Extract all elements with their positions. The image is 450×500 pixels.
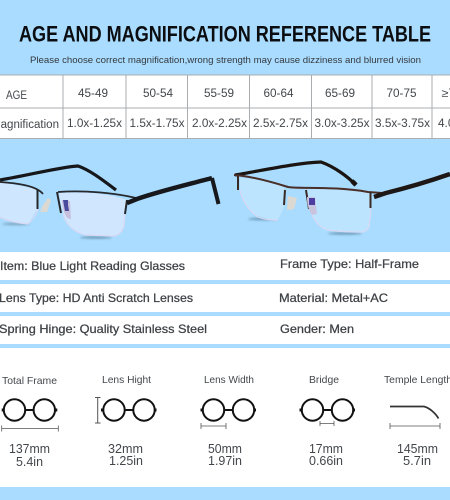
measurement: bridge [300, 374, 355, 468]
reference table: 60-64 [264, 88, 294, 100]
photo: glasses left [0, 166, 218, 239]
measurement: total frame: 5.4in [16, 455, 43, 469]
measurement: lens width: 1.97in [208, 454, 242, 468]
photo: glasses right [234, 162, 450, 235]
measurement: temple length: 145mm [397, 442, 438, 456]
reference table: 2.0x-2.25x [192, 118, 247, 130]
measurement: lens width [200, 374, 256, 468]
measurement: bridge: 0.66in [309, 454, 343, 468]
reference table: 1.0x-1.25x [67, 118, 122, 130]
reference table: 55-59 [204, 88, 234, 100]
reference table: 2.5x-2.75x [253, 118, 308, 130]
reference table: 50-54 [143, 88, 174, 100]
spec rows [0, 252, 450, 487]
spec rows: Gender: Men [280, 322, 354, 336]
measurement: lens height: 1.25in [109, 454, 143, 468]
measurement: lens height: Lens Hight [102, 374, 151, 386]
measurement: temple length: 5.7in [403, 454, 431, 468]
reference table: 70-75 [386, 88, 416, 100]
reference table: 65-69 [325, 88, 355, 100]
measurement: total frame: 137mm [9, 442, 50, 456]
reference table: 3.0x-3.25x [314, 118, 370, 130]
reference table [0, 75, 450, 138]
subtitle: Please choose correct magnification,wrong strength may cause dizziness and blurred vision [30, 54, 421, 65]
spec rows: Frame Type: Half-Frame [280, 257, 419, 271]
measurement: lens height [95, 374, 156, 468]
spec rows: Lens Type: HD Anti Scratch Lenses [0, 291, 193, 305]
measurement: bridge: 17mm [309, 442, 343, 456]
reference table: AGE [6, 90, 27, 102]
measurement: lens height: 32mm [108, 442, 143, 456]
reference table: 1.5x-1.75x [130, 118, 185, 130]
spec rows: Item: Blue Light Reading Glasses [0, 259, 185, 273]
measurement: total frame [2, 375, 58, 469]
spec rows: Material: Metal+AC [279, 291, 388, 305]
measurement: bridge: Bridge [309, 374, 339, 386]
spec rows: Spring Hinge: Quality Stainless Steel [0, 322, 207, 336]
measurement: total frame: Total Frame [2, 375, 57, 387]
reference table: 3.5x-3.75x [375, 118, 430, 130]
measurement: temple length [384, 374, 450, 468]
measurement: lens width: Lens Width [204, 374, 254, 386]
reference table: 45-49 [78, 88, 108, 100]
measurement: lens width: 50mm [208, 442, 242, 456]
